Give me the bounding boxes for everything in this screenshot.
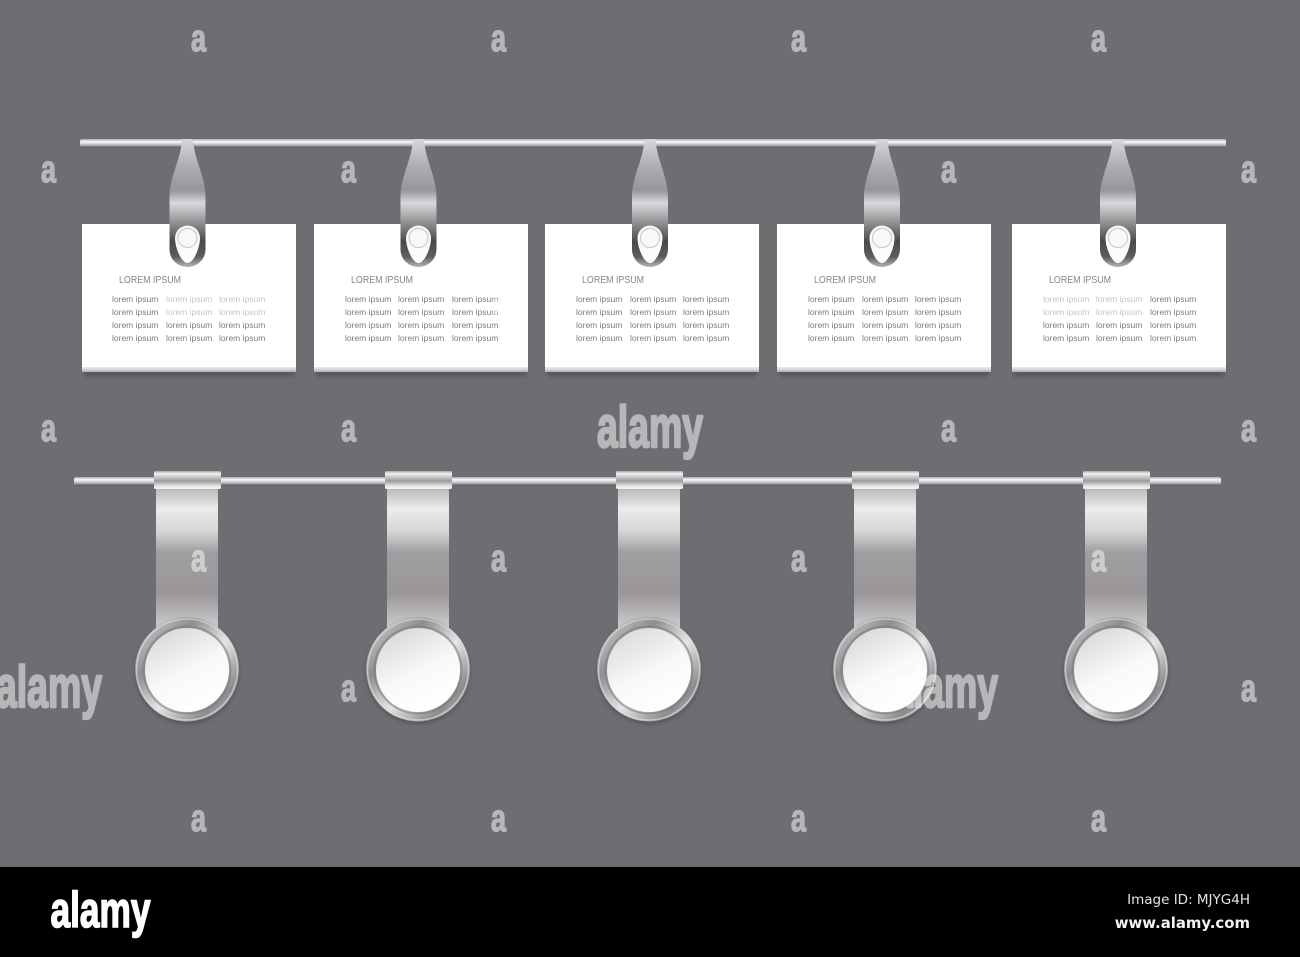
watermark: small repeated marks: a bbox=[1091, 18, 1107, 60]
panel: card 1: lorem ipsum bbox=[112, 320, 158, 330]
badge 1 bbox=[135, 471, 239, 724]
panel: card 5: lorem ipsum bbox=[1096, 320, 1142, 330]
panel: card 1: LOREM IPSUM bbox=[119, 275, 181, 286]
panel: card 3: lorem ipsum bbox=[683, 333, 729, 343]
panel: card 4: lorem ipsum bbox=[915, 333, 961, 343]
watermark: small repeated marks: a bbox=[791, 279, 807, 321]
panel: card 5: lorem ipsum bbox=[1096, 333, 1142, 343]
panel: card 1: lorem ipsum bbox=[219, 294, 265, 304]
watermark: small repeated marks: a bbox=[791, 538, 807, 580]
panel: card 5: lorem ipsum bbox=[1150, 294, 1196, 304]
panel: card 4: LOREM IPSUM bbox=[814, 275, 876, 286]
watermark: small repeated marks: a bbox=[341, 408, 357, 450]
icon: hanger 2 bbox=[400, 139, 436, 267]
panel: card 5: lorem ipsum bbox=[1150, 307, 1196, 317]
watermark: small repeated marks: a bbox=[941, 408, 957, 450]
panel: card 4: lorem ipsum bbox=[808, 333, 854, 343]
panel: card 1: lorem ipsum bbox=[112, 333, 158, 343]
panel: card 2: lorem ipsum bbox=[398, 307, 444, 317]
panel: card 2 bbox=[314, 224, 528, 376]
panel: card 3: LOREM IPSUM bbox=[582, 275, 644, 286]
watermark: centre: alamy bbox=[597, 395, 703, 460]
bottom rod bbox=[74, 477, 1221, 486]
panel: card 4: lorem ipsum bbox=[915, 320, 961, 330]
panel: card 2: lorem ipsum bbox=[452, 294, 498, 304]
watermark: small repeated marks: a bbox=[341, 668, 357, 710]
watermark: small repeated marks: a bbox=[491, 279, 507, 321]
panel: card 2: lorem ipsum bbox=[345, 333, 391, 343]
icon: hanger 3 bbox=[632, 139, 668, 267]
panel: card 4: lorem ipsum bbox=[862, 294, 908, 304]
watermark: small repeated marks: a bbox=[1091, 538, 1107, 580]
panel: card 4: lorem ipsum bbox=[862, 307, 908, 317]
panel: card 2: lorem ipsum bbox=[452, 307, 498, 317]
panel: card 1: lorem ipsum bbox=[112, 307, 158, 317]
panel: card 3: lorem ipsum bbox=[683, 294, 729, 304]
panel: card 5: lorem ipsum bbox=[1043, 333, 1089, 343]
panel: card 3: lorem ipsum bbox=[576, 294, 622, 304]
panel: card 3: lorem ipsum bbox=[630, 307, 676, 317]
watermark: small repeated marks: a bbox=[41, 408, 57, 450]
panel: card 4: lorem ipsum bbox=[915, 294, 961, 304]
panel: card 3: lorem ipsum bbox=[630, 294, 676, 304]
watermark: small repeated marks: a bbox=[1091, 798, 1107, 840]
panel: card 2: lorem ipsum bbox=[345, 307, 391, 317]
panel: card 3 bbox=[545, 224, 759, 376]
panel: card 3: lorem ipsum bbox=[630, 320, 676, 330]
watermark: right: alamy bbox=[892, 655, 998, 720]
panel: card 5: lorem ipsum bbox=[1043, 307, 1089, 317]
panel: card 5: LOREM IPSUM bbox=[1049, 275, 1111, 286]
panel: card 4: lorem ipsum bbox=[915, 307, 961, 317]
panel: card 3: lorem ipsum bbox=[683, 307, 729, 317]
panel: card 4: lorem ipsum bbox=[808, 320, 854, 330]
panel: card 2: lorem ipsum bbox=[398, 333, 444, 343]
badge 2 bbox=[366, 471, 470, 724]
panel: card 2: lorem ipsum bbox=[345, 320, 391, 330]
panel: card 5: lorem ipsum bbox=[1096, 307, 1142, 317]
watermark: small repeated marks: a bbox=[491, 18, 507, 60]
badge 5 bbox=[1064, 471, 1168, 724]
panel: card 3: lorem ipsum bbox=[683, 320, 729, 330]
panel: card 4: lorem ipsum bbox=[808, 294, 854, 304]
panel: card 2: lorem ipsum bbox=[452, 333, 498, 343]
panel: card 4 bbox=[777, 224, 991, 376]
panel: card 2: lorem ipsum bbox=[345, 294, 391, 304]
panel: card 5: lorem ipsum bbox=[1043, 294, 1089, 304]
watermark: small repeated marks: a bbox=[341, 149, 357, 191]
icon: hanger 5 bbox=[1100, 139, 1136, 267]
watermark: small repeated marks: a bbox=[1241, 668, 1257, 710]
panel: card 4: lorem ipsum bbox=[808, 307, 854, 317]
panel: card 4: lorem ipsum bbox=[862, 333, 908, 343]
icon: hanger 4 bbox=[864, 139, 900, 267]
top rod bbox=[80, 139, 1226, 148]
watermark: small repeated marks: a bbox=[41, 149, 57, 191]
panel: card 2: lorem ipsum bbox=[398, 294, 444, 304]
panel: card 3: lorem ipsum bbox=[630, 333, 676, 343]
panel: card 5 bbox=[1012, 224, 1226, 376]
panel: card 1: lorem ipsum bbox=[166, 307, 212, 317]
watermark: small repeated marks: a bbox=[191, 18, 207, 60]
panel: card 2: LOREM IPSUM bbox=[351, 275, 413, 286]
panel: card 3: lorem ipsum bbox=[576, 320, 622, 330]
panel: card 5: lorem ipsum bbox=[1096, 294, 1142, 304]
watermark: small repeated marks: a bbox=[1241, 149, 1257, 191]
panel: card 5: lorem ipsum bbox=[1043, 320, 1089, 330]
panel: card 4: lorem ipsum bbox=[862, 320, 908, 330]
panel: card 3: lorem ipsum bbox=[576, 307, 622, 317]
footer url: www.alamy.com bbox=[1115, 914, 1250, 932]
panel: card 1: lorem ipsum bbox=[166, 333, 212, 343]
footer bar bbox=[0, 867, 1300, 957]
panel: card 3: lorem ipsum bbox=[576, 333, 622, 343]
watermark: small repeated marks: a bbox=[491, 538, 507, 580]
panel: card 1: lorem ipsum bbox=[166, 320, 212, 330]
footer image id: Image ID: MJYG4H bbox=[1127, 892, 1250, 908]
panel: card 5: lorem ipsum bbox=[1150, 333, 1196, 343]
watermark: small repeated marks: a bbox=[791, 798, 807, 840]
panel: card 1: lorem ipsum bbox=[219, 320, 265, 330]
watermark: left: alamy bbox=[0, 655, 102, 720]
panel: card 1 bbox=[82, 224, 296, 376]
watermark: small repeated marks: a bbox=[1241, 408, 1257, 450]
panel: card 2: lorem ipsum bbox=[452, 320, 498, 330]
panel: card 2: lorem ipsum bbox=[398, 320, 444, 330]
watermark: small repeated marks: a bbox=[191, 798, 207, 840]
watermark: small repeated marks: a bbox=[791, 18, 807, 60]
badge 3 bbox=[597, 471, 701, 724]
panel: card 1: lorem ipsum bbox=[219, 307, 265, 317]
watermark: small repeated marks: a bbox=[491, 798, 507, 840]
panel: card 1: lorem ipsum bbox=[219, 333, 265, 343]
watermark: small repeated marks: a bbox=[941, 149, 957, 191]
icon: hanger 1 bbox=[170, 139, 206, 267]
panel: card 1: lorem ipsum bbox=[112, 294, 158, 304]
panel: card 5: lorem ipsum bbox=[1150, 320, 1196, 330]
panel: card 1: lorem ipsum bbox=[166, 294, 212, 304]
badge 4 bbox=[833, 471, 937, 724]
watermark: small repeated marks: a bbox=[191, 538, 207, 580]
footer logo: alamy bbox=[50, 882, 151, 938]
